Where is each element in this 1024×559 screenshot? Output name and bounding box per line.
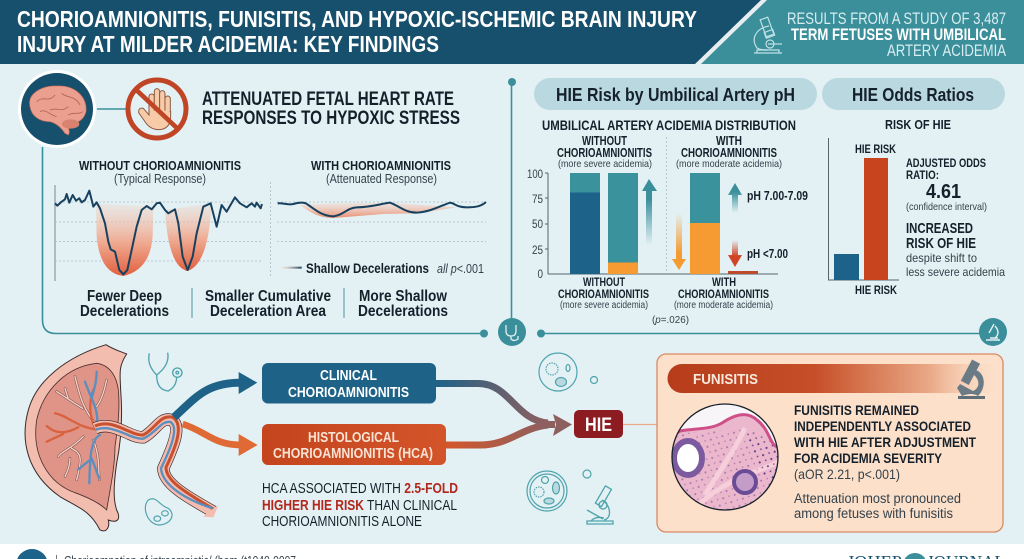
finding: more shallow decelerations: Decelerations — [358, 303, 448, 320]
header banner — [0, 0, 1024, 64]
journal name — [847, 552, 1005, 559]
histology image — [672, 404, 778, 510]
arrow: orange down — [672, 213, 686, 270]
column header: with — [676, 134, 782, 170]
icon: microbe outline — [145, 499, 172, 525]
bar chart: HIE RISK — [855, 285, 898, 297]
axis label: without — [558, 275, 649, 311]
bars — [570, 173, 758, 274]
panel: attenuated fetal heart rate responses — [18, 70, 488, 338]
y axis: 50 — [532, 219, 543, 231]
heading bar: FUNISITIS — [693, 371, 758, 388]
adjusted odds ratio: 4.61 — [926, 181, 961, 203]
axis label: without: (more severe acidemia) — [560, 300, 648, 311]
arrow: teal up right — [728, 183, 742, 213]
finding text: WITH HIE AFTER ADJUSTMENT — [794, 434, 976, 450]
connector: right horizontal rule — [537, 330, 985, 338]
axis label: with: (more moderate acidemia) — [674, 300, 773, 311]
title — [17, 6, 697, 57]
heading pill — [534, 78, 817, 110]
footer logo — [16, 549, 48, 559]
heading — [202, 89, 460, 129]
box: HIE: HIE — [585, 415, 612, 436]
box: histological chorioamnionitis: HISTOLOGICAL — [308, 430, 399, 446]
box: clinical chorioamnionitis: CLINICAL — [320, 368, 377, 384]
y axis: 0 — [538, 269, 543, 281]
icon: microscope badge — [979, 318, 1007, 346]
callout: HCA risk — [262, 480, 458, 530]
axis label: without: CHORIOAMNIONITIS — [558, 287, 649, 301]
panel: funisitis — [657, 354, 1003, 532]
increased risk note: RISK OF HIE — [906, 235, 976, 252]
panel: HIE odds ratios — [822, 78, 1005, 297]
title: CHORIOAMNIONITIS, FUNISITIS, AND HYPOXIC-ISCHEMIC BRAIN INJURY — [17, 6, 697, 32]
callout: HCA risk: HIGHER HIE RISK THAN CLINICAL — [262, 497, 457, 514]
arrow: teal up left — [642, 179, 657, 245]
stacked bar chart — [527, 169, 808, 281]
finding: more shallow decelerations: More Shallow — [359, 288, 447, 305]
finding: smaller cumulative deceleration area: Smaller Cumulative — [205, 288, 331, 305]
heading bar — [668, 364, 996, 393]
bar chart: HIE RISK — [855, 144, 897, 156]
axis label: without: WITHOUT — [583, 275, 625, 289]
adjusted odds ratio: ADJUSTED ODDS — [906, 156, 986, 170]
connector: vertical divider with dot — [508, 78, 516, 318]
label: pH 7.00-7.09: pH 7.00-7.09 — [747, 189, 808, 203]
y axis: 75 — [532, 194, 543, 206]
column header: with: (more moderate acidemia) — [676, 158, 782, 170]
callout: HCA risk: CHORIOAMNIONITIS ALONE — [262, 513, 422, 530]
panel: HIE risk by umbilical artery pH — [527, 78, 817, 326]
icon: petri dish top — [539, 353, 598, 391]
panel frame connector — [42, 147, 484, 334]
column header: with: CHORIOAMNIONITIS — [681, 146, 777, 160]
arrow: red down — [728, 240, 742, 267]
column header: without: WITHOUT — [582, 134, 627, 148]
finding text: INDEPENDENTLY ASSOCIATED — [794, 418, 971, 434]
y axis: 25 — [532, 245, 543, 257]
icon: microscope grey — [957, 360, 985, 399]
heading pill: HIE Odds Ratios — [852, 84, 974, 105]
finding: fewer deep decelerations: Fewer Deep — [87, 288, 162, 305]
illustration: placenta and umbilical cord — [25, 345, 218, 531]
finding: smaller cumulative deceleration area: Deceleration Area — [210, 303, 326, 320]
box: clinical chorioamnionitis: CHORIOAMNIONITIS — [288, 385, 409, 401]
adjusted odds ratio: RATIO: — [906, 168, 939, 182]
heading pill — [822, 78, 1005, 110]
finding: more shallow decelerations — [358, 288, 448, 320]
arrow: histological to HIE — [446, 414, 572, 445]
icon: stethoscope outline — [149, 353, 182, 391]
label: pH below 7.00: pH <7.00 — [747, 247, 788, 261]
column header: without: CHORIOAMNIONITIS — [557, 146, 652, 160]
arrow: clinical to HIE — [436, 384, 548, 423]
axis label: with: WITH — [712, 275, 736, 289]
box: histological chorioamnionitis: CHORIOAMNIONITIS (HCA) — [273, 446, 433, 462]
y axis: 100 — [527, 169, 543, 181]
finding text: FUNISITIS REMAINED — [794, 402, 919, 418]
chart: with chorioamnionitis trace: (Attenuated Response) — [326, 172, 437, 186]
chart: with chorioamnionitis trace: WITH CHORIOAMNIONITIS — [311, 159, 451, 173]
icon: microscope outline — [587, 486, 613, 524]
bar chart — [828, 138, 899, 297]
footer — [0, 544, 1024, 559]
axis label: with — [674, 275, 773, 311]
finding: fewer deep decelerations — [80, 288, 169, 320]
finding text: (aOR 2.21, p<.001) — [794, 466, 900, 482]
chart: without chorioamnionitis trace: WITHOUT CHORIOAMNIONITIS — [79, 159, 241, 173]
finding: fewer deep decelerations: Decelerations — [80, 303, 169, 320]
column header: with: WITH — [716, 134, 742, 148]
callout: HCA risk: HCA ASSOCIATED WITH 2.5-FOLD — [262, 480, 458, 497]
legend: all p<.001 — [437, 262, 484, 276]
arrow: cord to histological chorioamnionitis — [183, 424, 258, 456]
p value: (p=.026) — [652, 314, 689, 326]
adjusted odds ratio — [906, 156, 987, 213]
heading: RESPONSES TO HYPOXIC STRESS — [202, 108, 460, 129]
chart: without chorioamnionitis trace — [55, 159, 262, 281]
arrow: cord to clinical chorioamnionitis — [174, 372, 257, 417]
increased risk note: less severe acidemia — [906, 265, 1005, 279]
study summary — [787, 10, 1006, 60]
adjusted odds ratio: (confidence interval) — [906, 201, 987, 213]
finding text: among fetuses with funisitis — [794, 506, 953, 521]
heading: ATTENUATED FETAL HEART RATE — [202, 89, 454, 110]
column header: without: (more severe acidemia) — [558, 158, 652, 170]
increased risk note: despite shift to — [906, 251, 977, 265]
title: INJURY AT MILDER ACIDEMIA: KEY FINDINGS — [17, 31, 439, 57]
icon: petri dish bottom — [527, 470, 591, 511]
finding text — [794, 402, 976, 521]
chart heading: RISK OF HIE — [885, 117, 951, 132]
finding text: FOR ACIDEMIA SEVERITY — [794, 450, 943, 466]
chart: with chorioamnionitis trace — [277, 159, 486, 276]
axis label: with: CHORIOAMNIONITIS — [678, 287, 769, 301]
increased risk note — [906, 220, 1005, 279]
icon: brain — [18, 70, 96, 148]
chart: without chorioamnionitis trace: (Typical Response) — [114, 172, 206, 186]
icon: header microscope — [754, 17, 782, 53]
y axis — [527, 169, 778, 281]
box: clinical chorioamnionitis — [262, 363, 436, 404]
column header: without — [557, 134, 652, 170]
finding text: Attenuation most pronounced — [794, 491, 961, 506]
icon: stethoscope badge — [498, 318, 526, 346]
box: HIE — [574, 410, 623, 438]
chart heading: UMBILICAL ARTERY ACIDEMIA DISTRIBUTION — [542, 118, 796, 133]
finding: smaller cumulative deceleration area — [205, 288, 331, 320]
icon: no hand — [128, 80, 186, 138]
legend: Shallow Decelerations — [306, 260, 429, 276]
heading pill: HIE Risk by Umbilical Artery pH — [556, 84, 795, 105]
increased risk note: INCREASED — [906, 220, 973, 237]
box: histological chorioamnionitis — [262, 424, 446, 465]
